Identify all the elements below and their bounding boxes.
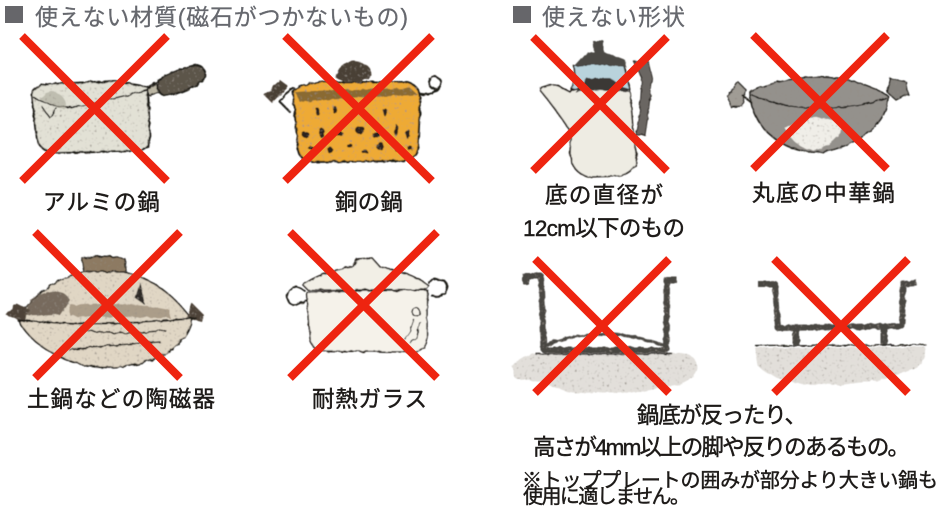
- panel: heat-resistant glass: [287, 232, 448, 412]
- red cross: [753, 35, 887, 169]
- red cross: [22, 36, 167, 181]
- icon: warped pot section: [512, 276, 697, 393]
- red cross: [533, 37, 667, 171]
- icon: earthenware pot: [6, 256, 204, 368]
- icon: footed pot section: [755, 283, 926, 385]
- panel: warped base cross-section: [512, 259, 697, 393]
- text: warped base caption: [533, 403, 910, 460]
- label: 土鍋などの陶磁器: [27, 387, 215, 412]
- text: warped base caption: 高さが4mm以上の脚や反りのあるもの。: [533, 435, 910, 460]
- text: footnote: 使用に適しません。: [523, 485, 690, 508]
- label: 12cm以下のもの: [523, 216, 685, 241]
- text: warped base caption: 鍋底が反ったり、: [637, 403, 807, 428]
- red cross: [285, 36, 432, 181]
- panel: aluminium pot: [22, 36, 205, 215]
- heading: unusable materials: 使えない材質(磁石がつかないもの): [35, 4, 408, 30]
- icon: aluminium pan: [32, 65, 205, 153]
- red cross: [535, 259, 669, 393]
- panel: footed base cross-section: [755, 259, 926, 393]
- text: footnote: ※トッププレートの囲みが部分より大きい鍋も: [522, 469, 938, 492]
- icon: coffee pot: [540, 41, 652, 177]
- label: 銅の鍋: [335, 190, 403, 215]
- label: 底の直径が: [545, 183, 663, 208]
- label: アルミの鍋: [43, 190, 160, 215]
- red cross: [774, 259, 908, 393]
- label: 耐熱ガラス: [312, 387, 427, 412]
- text: footnote: [522, 469, 938, 508]
- icon: wok: [728, 77, 908, 152]
- red cross: [35, 232, 180, 378]
- icon: copper pot: [264, 61, 441, 162]
- label: 丸底の中華鍋: [752, 181, 895, 206]
- panel: ceramic pot: [6, 232, 215, 412]
- red cross: [290, 232, 437, 378]
- panel: small-base kettle: [523, 37, 685, 241]
- heading: unusable shapes: 使えない形状: [542, 4, 685, 30]
- label: [523, 183, 685, 241]
- panel: copper pot: [264, 36, 441, 215]
- panel: round-bottom wok: [728, 35, 908, 206]
- icon: glass pot: [287, 258, 448, 352]
